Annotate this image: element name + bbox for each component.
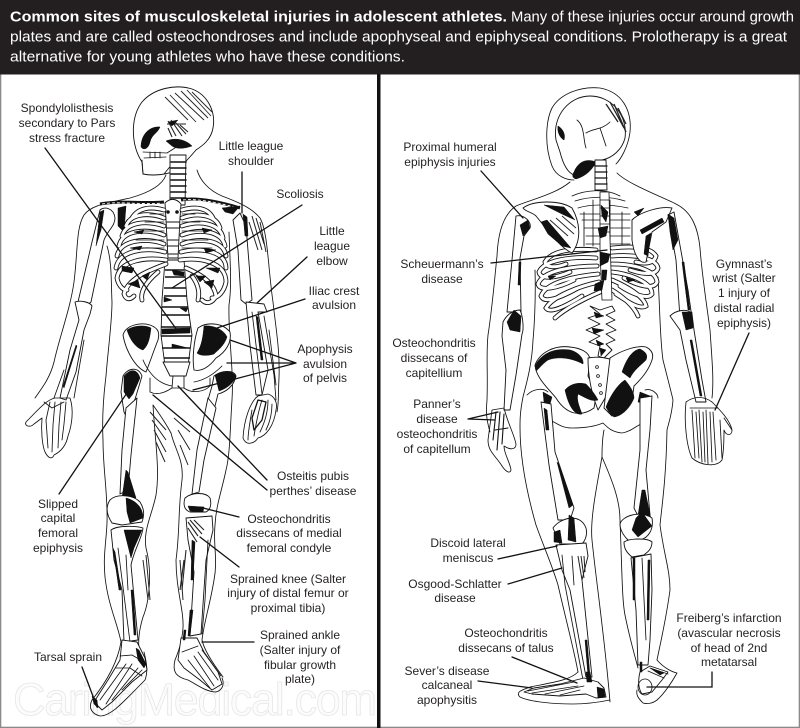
label: sprained knee: injury of distal femur or [227,586,349,600]
feet front [92,630,222,710]
scapulae [523,202,672,262]
leader lines front [45,148,307,707]
label: scheuermann: disease [421,272,463,286]
knees front [107,494,211,525]
label: apophysis avulsion: Apophysis [297,342,353,356]
label: little league elbow: league [314,239,350,253]
label: osgood-schlatter: Osgood-Schlatter [408,577,502,591]
label: tarsal sprain: Tarsal sprain [34,650,102,664]
hands front [26,394,277,458]
pelvis back [527,347,658,433]
header text: Common sites of musculoskeletal injuries in adolescent athletes. [10,8,507,26]
label: freiberg's infarction: (avascular necrosis [677,626,781,640]
label: iliac crest avulsion: Iliac crest [309,284,359,298]
femurs back [541,396,652,528]
label: gymnast's wrist: wrist (Salter [711,271,776,285]
label: little league shoulder: shoulder [228,154,274,168]
label: proximal humeral: epiphysis injuries [404,155,496,169]
panel: front skeleton [26,87,279,716]
hands back [488,398,732,472]
label: spondylolisthesis: secondary to Pars [19,116,115,130]
label: slipped capital femoral epiphysis: Slipped [38,497,78,511]
label: panner's disease: Panner’s [413,397,461,411]
body outline back [486,88,713,704]
label: sprained ankle: (Salter injury of [260,643,341,657]
skull front [133,87,214,175]
header text: plates and are called osteochondroses and include apophyseal and epiphyseal conditions. Prolotherapy is a great [10,28,788,46]
label: osteochondritis medial femoral condyle: Osteochondritis [247,512,331,526]
label: proximal humeral: Proximal humeral [403,140,497,154]
label: gymnast's wrist: epiphysis) [717,316,771,330]
label: panner's disease: disease [416,412,458,426]
label: gymnast's wrist: 1 injury of [718,286,771,300]
label: spondylolisthesis: Spondylolisthesis [21,101,113,115]
label: osteochondritis capitellium: capitellium [406,366,462,380]
watermark: CaringMedical.com [13,674,377,725]
label: sever's disease: Sever’s disease [405,664,489,678]
skull back [555,96,626,190]
label: gymnast's wrist: Gymnast’s [716,257,772,271]
label: iliac crest avulsion: avulsion [312,298,356,312]
femur heads front [121,369,236,420]
label: scoliosis: Scoliosis [276,187,324,201]
label: panner's disease: osteochondritis [397,427,477,441]
header text: Many of these injuries occur around growth [511,8,794,26]
label: osteochondritis talus: Osteochondritis [464,626,548,640]
label: osteochondritis medial femoral condyle: femoral condyle [247,541,332,555]
spine front [161,155,192,366]
label: osteochondritis medial femoral condyle: dissecans of medial [236,526,342,540]
label: slipped capital femoral epiphysis: capital [41,511,75,525]
label: sprained knee: Sprained knee (Salter [230,572,346,586]
femurs front [120,398,216,498]
label: freiberg's infarction: Freiberg’s infarction [676,611,782,625]
label: osteochondritis capitellium: dissecans of [401,351,468,365]
lower legs back [556,543,652,680]
sternum [165,199,181,258]
label: osteitis pubis: perthes’ disease [270,484,357,498]
labels front [19,101,360,686]
label: sprained ankle: Sprained ankle [260,628,340,642]
label: little league elbow: Little [319,224,345,238]
labels back [392,140,782,707]
spine back [586,192,616,358]
label: panner's disease: of capitellum [403,442,471,456]
label: freiberg's infarction: of head of 2nd [691,641,767,655]
hatching front [143,412,190,600]
label: osteochondritis talus: dissecans of talus [458,641,554,655]
label: osgood-schlatter: disease [434,591,476,605]
arms back [502,212,706,410]
label: sever's disease: apophysitis [417,693,477,707]
header banner [0,0,800,74]
label: osteitis pubis: Osteitis pubis [277,469,349,483]
label: slipped capital femoral epiphysis: epiphysis [33,541,83,555]
arms front [54,208,276,400]
header text: alternative for young athletes who have these conditions. [10,48,405,66]
rib cage front [116,208,226,303]
panel: back skeleton [486,88,732,704]
rib cage back [538,191,658,318]
label: freiberg's infarction: metatarsal [701,655,757,669]
label: gymnast's wrist: distal radial [714,301,774,315]
label: sprained ankle: plate) [285,672,315,686]
label: sever's disease: calcaneal [422,678,472,692]
label: sprained ankle: fibular growth [264,658,336,672]
lower legs front [111,516,213,642]
panel divider [377,74,380,728]
clavicles [100,199,240,232]
label: apophysis avulsion: avulsion [303,357,347,371]
knees back [553,512,652,557]
label: spondylolisthesis: stress fracture [29,131,105,145]
label: apophysis avulsion: of pelvis [303,371,347,385]
pelvis front [123,324,230,394]
label: discoid lateral meniscus: meniscus [443,551,493,565]
label: scheuermann: Scheuermann’s [400,257,484,271]
header text [10,8,794,66]
label: little league shoulder: Little league [219,139,283,153]
label: osteochondritis capitellium: Osteochondritis [392,336,476,350]
label: sprained knee: proximal tibia) [251,601,325,615]
body outline front [35,170,279,716]
label: slipped capital femoral epiphysis: femoral [38,526,78,540]
leader lines back [468,171,749,688]
feet back [524,662,668,698]
label: little league elbow: elbow [316,254,348,268]
label: discoid lateral meniscus: Discoid lateral [430,536,506,550]
